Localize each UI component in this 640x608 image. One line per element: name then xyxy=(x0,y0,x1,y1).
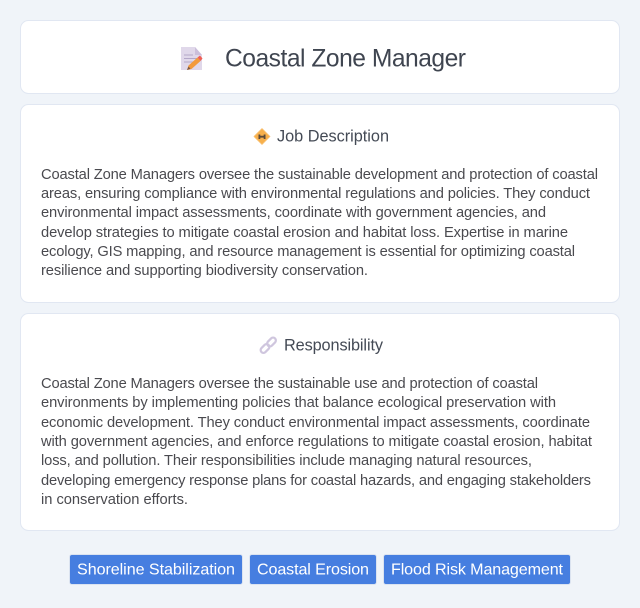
text block: responsibility: with government agencies, and enforce regulations to mitigate coastal erosion, habitat xyxy=(40,434,592,450)
text block: job description: areas, ensuring compliance with environmental regulations and policies. They conduct xyxy=(41,186,590,202)
tag: coastal erosion: Coastal Erosion xyxy=(257,560,369,578)
tag: flood risk management: Flood Risk Management xyxy=(391,560,564,578)
heading: job description: Job Description xyxy=(277,128,389,146)
heading: responsibility: Responsibility xyxy=(284,336,384,354)
text block: responsibility: economic development. They conduct environmental impact assessments, coordinate xyxy=(41,415,590,431)
text block: job description: resilience and supporting biodiversity conservation. xyxy=(41,263,368,279)
icon: document with pencil xyxy=(181,47,202,70)
panel: job description xyxy=(20,104,620,302)
tag: shoreline stabilization: Shoreline Stabilization xyxy=(77,560,235,578)
panel: title card xyxy=(20,20,620,94)
text block: responsibility: environments by implementing policies that balance ecological preservation with xyxy=(41,395,556,411)
text block: responsibility: loss, and pollution. Their responsibilities include managing natural resources, xyxy=(41,453,532,469)
text block: job description: Coastal Zone Managers oversee the sustainable development and protection of coastal xyxy=(41,167,598,183)
text block: responsibility xyxy=(40,376,592,508)
icon: link xyxy=(259,336,277,354)
title: Coastal Zone Manager xyxy=(225,46,466,72)
tag: flood risk management xyxy=(384,554,570,584)
panel: responsibility xyxy=(20,314,620,530)
text block: job description: environmental impact assessments, coordinate with government agencies, and xyxy=(41,205,546,221)
tag: coastal erosion xyxy=(250,554,376,584)
text block: responsibility: Coastal Zone Managers oversee the sustainable use and protection of coastal xyxy=(41,376,538,392)
text block: job description: develop strategies to mitigate coastal erosion and habitat loss. Expertise in marine xyxy=(41,225,568,241)
text block: responsibility: in conservation efforts. xyxy=(41,492,188,508)
tag: shoreline stabilization xyxy=(70,554,242,584)
text block: job description: ecology, GIS mapping, and resource management is essential for optimizing coastal xyxy=(41,244,575,260)
icon: orange diamond xyxy=(254,128,270,144)
text block: job description xyxy=(41,167,598,279)
text block: responsibility: developing emergency response plans for coastal hazards, and engaging stakeholders xyxy=(41,473,591,489)
